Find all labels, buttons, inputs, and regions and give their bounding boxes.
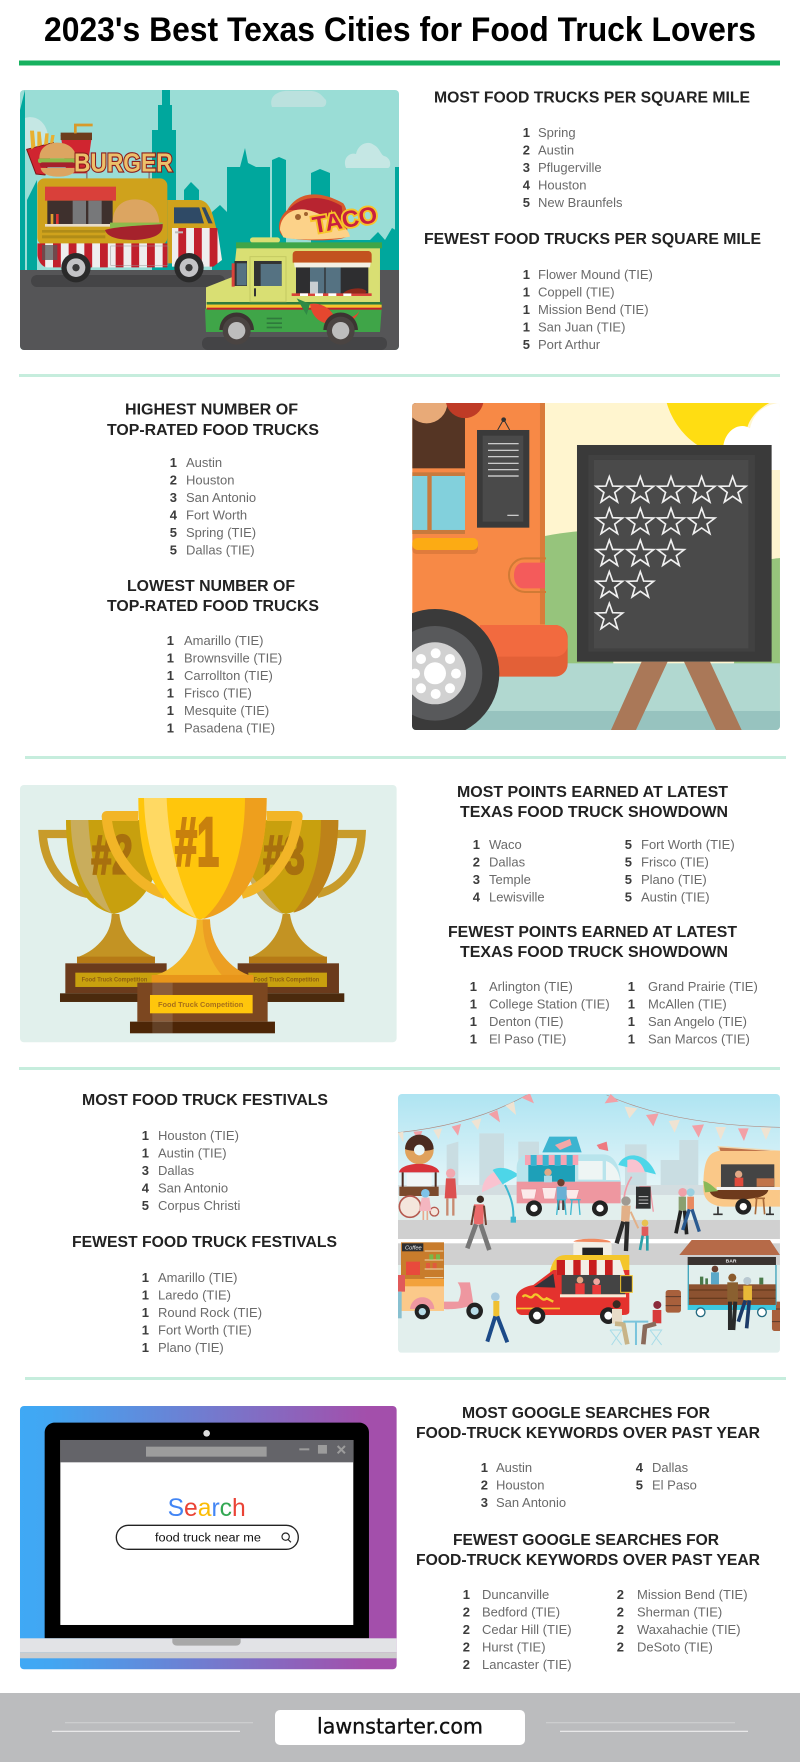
ranked list [470, 979, 758, 1047]
ranked list: 1 [470, 979, 477, 994]
child at cart [419, 1189, 431, 1220]
person at kiosk edge [398, 1275, 405, 1318]
ranked list: San Marcos (TIE) [648, 1032, 750, 1047]
ranked list: 1 [167, 686, 174, 701]
ranked list: Corpus Christi [158, 1198, 240, 1213]
ranked list: 1 [628, 1014, 635, 1029]
ranked list: 1 [167, 668, 174, 683]
ranked list [142, 1270, 262, 1355]
body [206, 247, 380, 310]
ranked list: San Angelo (TIE) [648, 1014, 747, 1029]
ranked list: 1 [142, 1305, 149, 1320]
ranked list: 2 [463, 1605, 470, 1620]
umbrella right [618, 1155, 656, 1198]
diners at table [610, 1300, 662, 1345]
title underline [19, 60, 780, 66]
panel: food truck festival scene [398, 1093, 782, 1353]
coffee kiosk: Coffee [405, 1245, 422, 1251]
ranked list: Mission Bend (TIE) [538, 302, 649, 317]
list block: most food truck festivals [82, 1092, 328, 1213]
ranked list: 3 [170, 490, 177, 505]
heading: FEWEST POINTS EARNED AT LATEST [448, 924, 737, 941]
ranked list: Round Rock (TIE) [158, 1305, 262, 1320]
ranked list: 1 [142, 1323, 149, 1338]
ranked list: 1 [628, 1032, 635, 1047]
ranked list [170, 455, 256, 558]
ranked list: Waxahachie (TIE) [637, 1622, 741, 1637]
ranked list: Austin (TIE) [641, 890, 710, 905]
ranked list: 1 [142, 1128, 149, 1143]
ranked list: 1 [167, 633, 174, 648]
ranked list: Cedar Hill (TIE) [482, 1622, 572, 1637]
ranked list: San Antonio [186, 490, 256, 505]
ranked list [481, 1460, 697, 1510]
website name: lawnstarter.com [317, 1714, 483, 1738]
list block: most google searches [416, 1405, 760, 1510]
vendor woman in red [445, 1169, 457, 1216]
tail light [509, 558, 546, 592]
ranked list: Plano (TIE) [158, 1340, 224, 1355]
cloud [723, 403, 780, 470]
ranked list: Pflugerville [538, 160, 602, 175]
ranked list: 1 [167, 651, 174, 666]
ranked list: 2 [617, 1587, 624, 1602]
heading [107, 402, 319, 439]
menu board [477, 417, 529, 528]
heading [457, 784, 728, 821]
ranked list: 4 [636, 1460, 644, 1475]
ranked list: Houston (TIE) [158, 1128, 239, 1143]
list block: fewest food trucks per square mile [424, 231, 761, 352]
ranked list: Amarillo (TIE) [158, 1270, 237, 1285]
ranked list [473, 837, 735, 905]
ranked list: Duncanville [482, 1587, 549, 1602]
ranked list: Temple [489, 872, 531, 887]
ranked list: 5 [523, 337, 530, 352]
ranked list: 1 [523, 267, 530, 282]
ranked list: Spring (TIE) [186, 525, 256, 540]
taco truck [205, 194, 382, 345]
ranked list: Mission Bend (TIE) [637, 1587, 748, 1602]
laptop bezel [45, 1423, 369, 1638]
ranked list: Pasadena (TIE) [184, 721, 275, 736]
ranked list: 2 [523, 143, 530, 158]
footer [0, 1693, 800, 1762]
list block: highest number of top-rated food trucks [107, 402, 319, 558]
ranked list: 2 [170, 473, 177, 488]
trophy #1: #1 [175, 805, 219, 881]
ranked list: Austin [538, 143, 574, 158]
ranked list: 2 [463, 1622, 470, 1637]
heading: MOST GOOGLE SEARCHES FOR [462, 1405, 710, 1422]
heading [448, 924, 737, 961]
ranked list: 1 [142, 1340, 149, 1355]
ranked list: Plano (TIE) [641, 872, 707, 887]
ranked list: Houston [538, 178, 586, 193]
ranked list: College Station (TIE) [489, 997, 610, 1012]
red food truck [516, 1239, 632, 1324]
ranked list: Dallas [652, 1460, 689, 1475]
panel: food trucks illustration [20, 90, 399, 350]
ranked list: 2 [481, 1478, 488, 1493]
search bar: food truck near me [155, 1530, 261, 1544]
awning [293, 251, 372, 263]
website badge [275, 1710, 525, 1745]
stars [596, 477, 746, 629]
ranked list: Fort Worth [186, 508, 247, 523]
ranked list: 4 [523, 178, 531, 193]
ranked list: 5 [625, 872, 632, 887]
ranked list: Austin (TIE) [158, 1146, 227, 1161]
burger truck [703, 1147, 780, 1215]
ground and road [398, 1195, 780, 1220]
ranked list: 1 [473, 837, 480, 852]
ranked list: 4 [170, 508, 178, 523]
serving window [47, 201, 113, 225]
ranked list: 1 [481, 1460, 488, 1475]
ranked list: 3 [481, 1495, 488, 1510]
ranked list: 4 [473, 890, 481, 905]
ranked list: 1 [628, 997, 635, 1012]
laptop base [20, 1638, 397, 1658]
heading: TOP-RATED FOOD TRUCKS [107, 422, 319, 439]
cab [167, 200, 222, 263]
heading [416, 1405, 760, 1442]
ranked list: El Paso (TIE) [489, 1032, 566, 1047]
heading: FEWEST GOOGLE SEARCHES FOR [453, 1532, 719, 1549]
list block: lowest number of top-rated food trucks [107, 578, 319, 736]
list block: fewest google searches [416, 1532, 760, 1672]
ranked list: Amarillo (TIE) [184, 633, 263, 648]
heading: TOP-RATED FOOD TRUCKS [107, 598, 319, 615]
awning [45, 187, 116, 201]
ground [412, 663, 780, 730]
ranked list: Austin [186, 455, 222, 470]
ranked list: Dallas [489, 855, 526, 870]
ranked list: 1 [170, 455, 177, 470]
ranked list: Fort Worth (TIE) [158, 1323, 252, 1338]
trophy #2: #2 [91, 823, 133, 885]
ranked list: 1 [523, 125, 530, 140]
ranked list: Austin [496, 1460, 532, 1475]
browser title bar [60, 1440, 353, 1462]
woman and child [617, 1196, 648, 1251]
ranked list [523, 125, 623, 210]
counter shelf [412, 545, 478, 554]
burger icon [39, 143, 76, 158]
screen [60, 1440, 353, 1625]
ranked list: San Antonio [496, 1495, 566, 1510]
fries [27, 143, 53, 175]
ranked list: Houston [186, 473, 234, 488]
counter [292, 293, 372, 296]
heading: FOOD-TRUCK KEYWORDS OVER PAST YEAR [416, 1425, 760, 1442]
list block: fewest food truck festivals [72, 1234, 337, 1355]
ranked list: Dallas [158, 1163, 195, 1178]
barrels [666, 1290, 782, 1331]
heading: FOOD-TRUCK KEYWORDS OVER PAST YEAR [416, 1552, 760, 1569]
ranked list: Sherman (TIE) [637, 1605, 722, 1620]
cab window [234, 261, 247, 286]
list block: fewest points earned [448, 924, 758, 1047]
ranked list: Brownsville (TIE) [184, 651, 282, 666]
ranked list: 1 [523, 302, 530, 317]
man walking [467, 1196, 489, 1250]
trophy #1 [107, 798, 298, 1033]
title: 2023's Best Texas Cities for Food Truck Lovers [44, 11, 756, 49]
ranked list: 1 [628, 979, 635, 994]
heading: HIGHEST NUMBER OF [125, 402, 298, 418]
ranked list: Dallas (TIE) [186, 543, 255, 558]
ranked list: 5 [142, 1198, 149, 1213]
panel: laptop search illustration [20, 1406, 397, 1669]
ranked list: 1 [167, 721, 174, 736]
heading: TEXAS FOOD TRUCK SHOWDOWN [460, 804, 728, 821]
heading: FEWEST FOOD TRUCK FESTIVALS [72, 1234, 337, 1251]
ranked list: 1 [523, 320, 530, 335]
ranked list: McAllen (TIE) [648, 997, 727, 1012]
couple walking [676, 1188, 699, 1234]
bar stall: BAR [726, 1259, 737, 1265]
serving window [296, 267, 368, 294]
drink [61, 135, 92, 173]
ranked list: 1 [167, 703, 174, 718]
ranked list: 5 [625, 890, 632, 905]
hills [545, 530, 613, 667]
ranked list: 5 [523, 195, 530, 210]
heading [416, 1532, 760, 1569]
grille vents [267, 318, 282, 319]
ranked list: 2 [463, 1640, 470, 1655]
scooter [444, 1282, 483, 1319]
woman in yellow walking [487, 1292, 507, 1342]
search bar [116, 1525, 298, 1549]
roof [236, 242, 382, 248]
food on counter [343, 288, 367, 293]
roof detail [250, 237, 280, 243]
skyline [20, 90, 399, 270]
ranked list: 1 [142, 1288, 149, 1303]
ranked list: Port Arthur [538, 337, 601, 352]
ranked list: 2 [617, 1622, 624, 1637]
heading: MOST POINTS EARNED AT LATEST [457, 784, 728, 801]
ranked list: 5 [625, 855, 632, 870]
ranked list: Grand Prairie (TIE) [648, 979, 758, 994]
heading: LOWEST NUMBER OF [127, 578, 295, 595]
list block: most food trucks per square mile [434, 90, 750, 210]
city silhouettes [446, 1134, 698, 1185]
list block: most points earned [457, 784, 735, 905]
truck body [412, 403, 545, 636]
ranked list: 2 [463, 1657, 470, 1672]
wheel [412, 609, 500, 730]
ranked list: Laredo (TIE) [158, 1288, 231, 1303]
chili pepper [310, 304, 359, 324]
sun [667, 403, 770, 447]
search logo: Search [168, 1495, 246, 1522]
ranked list: Houston [496, 1478, 544, 1493]
door [250, 257, 286, 302]
ranked list: 5 [170, 525, 177, 540]
ice cream sign [636, 1187, 653, 1212]
umbrella left [482, 1168, 519, 1223]
ranked list: Hurst (TIE) [482, 1640, 546, 1655]
sign poles [86, 172, 88, 179]
trophy #3 [238, 820, 362, 1002]
ranked list: 4 [142, 1181, 150, 1196]
ranked list: Coppell (TIE) [538, 285, 615, 300]
ranked list: 3 [473, 872, 480, 887]
bumper [497, 625, 568, 677]
windshield [174, 207, 204, 223]
ranked list: New Braunfels [538, 195, 623, 210]
ranked list: Flower Mound (TIE) [538, 267, 653, 282]
coffee kiosk [401, 1242, 444, 1319]
trophy #2: Food Truck Competition [82, 978, 148, 984]
ranked list: Lewisville [489, 890, 545, 905]
ranked list: Frisco (TIE) [184, 686, 252, 701]
wheels [61, 253, 91, 282]
bunting [398, 1093, 780, 1142]
ranked list: 5 [625, 837, 632, 852]
ranked list: 1 [523, 285, 530, 300]
ranked list: Bedford (TIE) [482, 1605, 560, 1620]
ranked list: 2 [617, 1640, 624, 1655]
trophy #1: Food Truck Competition [158, 1000, 244, 1009]
taco shell [279, 194, 348, 240]
easel legs [611, 662, 742, 730]
ranked list: Mesquite (TIE) [184, 703, 269, 718]
trophy #3: #3 [263, 823, 305, 885]
ranked list: 1 [142, 1146, 149, 1161]
ranked list: San Juan (TIE) [538, 320, 625, 335]
trophy #2 [43, 820, 167, 1002]
burger on truck [113, 199, 159, 223]
ranked list: 1 [470, 1032, 477, 1047]
chalkboard [577, 445, 772, 662]
trophy #3: Food Truck Competition [254, 978, 320, 984]
heading: MOST FOOD TRUCK FESTIVALS [82, 1092, 328, 1109]
donut cart [399, 1135, 439, 1217]
bar stall [679, 1240, 780, 1317]
ranked list [463, 1587, 748, 1672]
ranked list: 1 [470, 997, 477, 1012]
ranked list: 5 [636, 1478, 643, 1493]
heading: FEWEST FOOD TRUCKS PER SQUARE MILE [424, 231, 761, 248]
awning and window [412, 403, 465, 468]
lower green panel [205, 309, 382, 332]
ranked list: El Paso [652, 1478, 697, 1493]
ranked list: 2 [617, 1605, 624, 1620]
ranked list: San Antonio [158, 1181, 228, 1196]
stripes [37, 243, 167, 267]
ranked list [142, 1128, 240, 1213]
heading: TEXAS FOOD TRUCK SHOWDOWN [460, 944, 728, 961]
burger sign text: BURGER [74, 147, 173, 177]
taco sign text: TACO [310, 201, 379, 238]
panel: trophies [20, 785, 397, 1042]
ranked list: 3 [523, 160, 530, 175]
ranked list: Frisco (TIE) [641, 855, 709, 870]
ranked list: 1 [463, 1587, 470, 1602]
ranked list: 3 [142, 1163, 149, 1178]
ranked list: 1 [470, 1014, 477, 1029]
ranked list [167, 633, 282, 736]
heading: MOST FOOD TRUCKS PER SQUARE MILE [434, 90, 750, 106]
ranked list: Fort Worth (TIE) [641, 837, 735, 852]
ranked list: Lancaster (TIE) [482, 1657, 572, 1672]
ranked list: 5 [170, 543, 177, 558]
couple at bar [727, 1274, 752, 1330]
ranked list: Waco [489, 837, 522, 852]
ranked list: Denton (TIE) [489, 1014, 563, 1029]
ranked list: 1 [142, 1270, 149, 1285]
ranked list: Carrollton (TIE) [184, 668, 273, 683]
road [20, 270, 399, 350]
clouds [271, 91, 326, 107]
burger truck [27, 125, 222, 282]
ranked list [523, 267, 653, 352]
ranked list: DeSoto (TIE) [637, 1640, 713, 1655]
ranked list: Spring [538, 125, 576, 140]
wheels [219, 312, 254, 330]
cargo box [37, 178, 167, 245]
pink ice cream truck [517, 1137, 621, 1216]
heading [107, 578, 319, 615]
panel: food truck with star chalkboard [412, 403, 780, 730]
ranked list: 2 [473, 855, 480, 870]
ranked list: Arlington (TIE) [489, 979, 573, 994]
